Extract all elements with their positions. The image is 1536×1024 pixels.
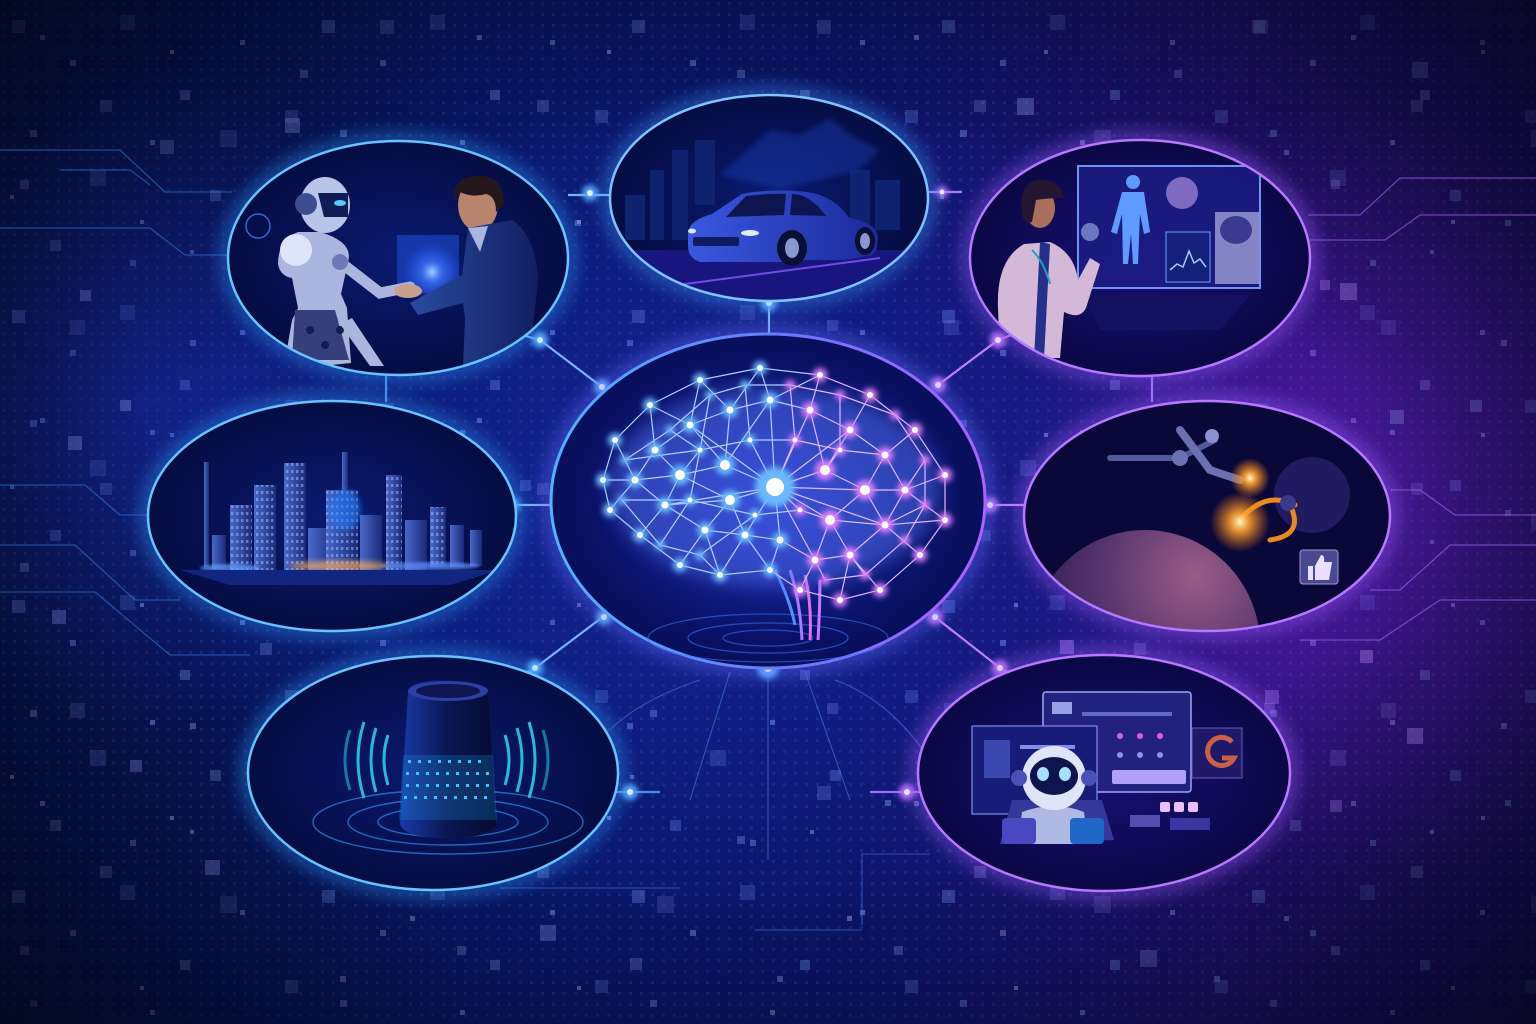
connectors [386,192,1152,792]
panel: smart city [148,401,516,631]
panel: autonomous car [610,95,930,310]
icon: businessman [410,176,538,370]
chart card [1192,728,1242,778]
road [634,250,904,300]
icon: robot assistant [1000,746,1114,844]
panel: space robotics [1024,401,1390,760]
panel: chatbot assistant dashboards [918,655,1290,891]
sound waves [345,722,548,798]
icon: speaker [399,680,497,838]
circuit traces bottom [500,668,930,930]
hands [394,284,422,298]
connector nodes [504,185,1008,800]
dashboard large [1043,692,1191,792]
medical display [1078,166,1260,330]
floor rings [313,790,583,854]
icon: doctor [998,180,1100,359]
icon: thumbs up [1300,550,1338,584]
circuit traces right [1300,178,1536,640]
circuit traces left [0,150,250,655]
hologram screen [397,235,459,293]
panel: smart speaker [248,656,618,890]
planets [1030,530,1260,760]
small modules [1130,802,1210,830]
brain nodes core [600,365,948,603]
brain floor rings [648,614,888,662]
panel: robot and human handshake [228,141,568,375]
icon: car [688,190,878,266]
windows [230,463,446,572]
icon: body scan [1111,175,1150,264]
brain stem [775,570,820,640]
brain glow [610,387,940,587]
icon: robot [278,177,410,366]
city skyline behind car [625,140,900,240]
brain network lines [603,368,945,600]
panel: doctor with medical display [970,140,1310,376]
city lights [200,490,480,572]
sparks [1210,492,1270,552]
skyline [204,452,482,574]
brain nodes glow [596,361,952,607]
panel: central brain [551,334,985,668]
dashboard left [972,726,1097,814]
robotic arm [1110,430,1295,540]
